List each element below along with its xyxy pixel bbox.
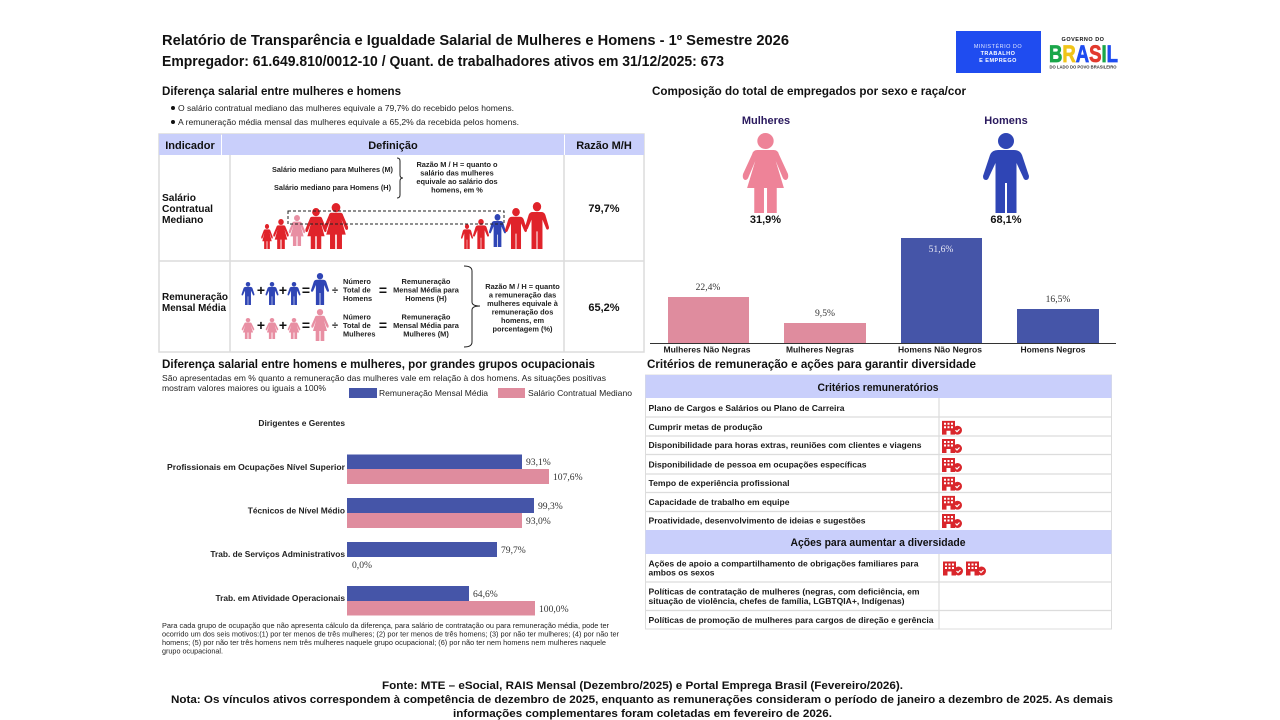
title: Relatório de Transparência e Igualdade Salarial de Mulheres e Homens - 1º Semestre 2026: [162, 33, 789, 49]
row: remuneração mensal média: 65,2%: [588, 302, 620, 314]
formula: homens: +: [279, 282, 287, 298]
group: serviços administrativos: 79,7%: [501, 545, 526, 556]
row: salário contratual mediano: Razão M / H = quanto o: [416, 160, 498, 169]
formula: mulheres: Mensal Média para: [393, 321, 460, 330]
formula: homens: Homens: [343, 294, 372, 303]
row: remuneração mensal média: Remuneração: [162, 292, 228, 303]
group: técnicos: 93,0%: [526, 516, 551, 527]
action rows: Políticas de contratação de mulheres (negras, com deficiência, em: [648, 587, 920, 597]
logo: Ministério do Trabalho e Emprego: TRABALHO: [981, 51, 1016, 57]
icon group: homens: [461, 202, 549, 249]
icon: homens 68,1%: Homens: [984, 115, 1028, 127]
group: atividade operacionais: Trab. em Atividade Operacionais: [215, 593, 345, 603]
heading: critérios: Critérios de remuneração e ações para garantir diversidade: [647, 357, 976, 371]
row: salário contratual mediano: Salário mediano para Mulheres (M): [272, 165, 394, 174]
bar: mulheres não negras: Mulheres Não Negras: [664, 344, 751, 354]
table header: Razão M/H: [576, 140, 632, 152]
criteria rows: Capacidade de trabalho em equipe: [648, 497, 790, 507]
chart description: [162, 373, 606, 393]
group: serviços administrativos: Trab. de Serviços Administrativos: [210, 549, 345, 559]
bullet list: O salário contratual mediano das mulheres equivale a 79,7% do recebido pelos homens.: [178, 103, 514, 113]
row: salário contratual mediano: equivale ao salário dos: [416, 177, 498, 186]
icon group: mulheres: [261, 203, 348, 249]
formula: mulheres: ÷: [332, 320, 338, 332]
bar: homens negros: [1017, 294, 1099, 354]
group: serviços administrativos: [210, 542, 526, 571]
formula: homens: +: [257, 282, 265, 298]
action rows: ambos os sexos: [648, 568, 715, 578]
logo: Ministério do Trabalho e Emprego: E EMPREGO: [979, 58, 1017, 64]
row: remuneração mensal média: [162, 266, 620, 347]
source and note: informações complementares foram coletadas em fevereiro de 2026.: [453, 708, 832, 720]
row: remuneração mensal média: Mensal Média: [162, 303, 226, 314]
footnote: ocorrido um dos seis motivos:(1) por ter menos de três mulheres; (2) por ter menos de três homens; (3) por não ter mulheres; (4) por não ter: [162, 630, 619, 638]
row: salário contratual mediano: salário das mulheres: [420, 168, 494, 178]
heading: diferença salarial: Diferença salarial entre mulheres e homens: [162, 84, 401, 98]
logo: Governo do Brasil: GOVERNO DO: [1062, 37, 1105, 43]
legend: Salário Contratual Mediano: [528, 388, 632, 398]
formula: homens: Número: [343, 277, 371, 286]
chart description: São apresentadas em % quanto a remuneração das mulheres vale em relação à dos homens. As situações positivas: [162, 373, 606, 383]
formula: homens: [242, 273, 460, 305]
formula: mulheres: =: [302, 317, 310, 333]
action rows: situação de violência, chefes de família, LGBTQIA+, Indígenas): [648, 596, 905, 606]
row: salário contratual mediano: Mediano: [162, 215, 203, 226]
formula: homens: Homens (H): [405, 294, 447, 303]
row: salário contratual mediano: Contratual: [162, 204, 213, 215]
bar: mulheres negras: Mulheres Negras: [786, 344, 854, 354]
logo: Governo do Brasil: BRASIL: [1049, 41, 1118, 68]
icon: mulheres 31,9%: [742, 115, 790, 226]
group: serviços administrativos: 0,0%: [352, 560, 372, 571]
footnote: [162, 621, 619, 656]
source and note: [171, 680, 1113, 720]
heading: composição: Composição do total de empregados por sexo e raça/cor: [652, 84, 966, 98]
bar: mulheres negras: 9,5%: [815, 308, 835, 319]
formula: homens: Remuneração: [402, 277, 451, 286]
formula: mulheres: Total de: [343, 321, 371, 330]
heading: grupos ocupacionais: Diferença salarial entre homens e mulheres, por grandes grupos ocupacionais: [162, 357, 595, 371]
formula: mulheres: Mulheres: [343, 330, 375, 338]
icon: mulheres 31,9%: Mulheres: [742, 115, 790, 127]
header: critérios remuneratórios: [646, 375, 1112, 398]
chart description: mostram valores maiores ou iguais a 100%: [162, 383, 326, 393]
source and note: Fonte: MTE – eSocial, RAIS Mensal (Dezembro/2025) e Portal Emprega Brasil (Fevereiro/2026).: [382, 680, 903, 692]
row: remuneração mensal média: porcentagem (%): [493, 324, 553, 334]
bar: mulheres negras: [784, 308, 866, 354]
group: profissionais: 93,1%: [526, 457, 551, 468]
group: profissionais: [167, 454, 583, 484]
icons: two buildings: [943, 562, 986, 576]
bar: homens negros: 16,5%: [1046, 294, 1070, 305]
icon: mulheres 31,9%: 31,9%: [750, 214, 781, 226]
bar chart: grupos ocupacionais: [167, 418, 583, 616]
bar: mulheres não negras: [664, 282, 751, 354]
header: critérios remuneratórios: Critérios remuneratórios: [818, 382, 938, 394]
formula: mulheres: +: [257, 317, 265, 333]
logo: Ministério do Trabalho e Emprego: [956, 31, 1041, 73]
row: salário contratual mediano: [162, 158, 620, 249]
formula: mulheres: [242, 309, 460, 341]
criteria rows: Tempo de experiência profissional: [648, 478, 790, 488]
row: salário contratual mediano: Salário: [162, 193, 196, 204]
criteria table: [646, 375, 1112, 629]
logo: Ministério do Trabalho e Emprego: MINISTÉRIO DO: [974, 43, 1022, 50]
formula: homens: =: [379, 282, 387, 298]
bar: homens negros: Homens Negros: [1020, 344, 1086, 354]
title: [162, 33, 789, 70]
criteria rows: [648, 403, 922, 526]
row: remuneração mensal média: mulheres equivale à: [487, 299, 559, 308]
criteria rows: Disponibilidade de pessoa em ocupações específicas: [648, 460, 867, 470]
formula: mulheres: Número: [343, 312, 371, 322]
bar: mulheres não negras: 22,4%: [696, 282, 720, 293]
group: técnicos: [248, 498, 563, 528]
action rows: Políticas de promoção de mulheres para cargos de direção e gerência: [648, 615, 934, 625]
criteria rows: Plano de Cargos e Salários ou Plano de Carreira: [648, 403, 845, 413]
bar: homens não negros: 51,6%: [929, 244, 953, 255]
footnote: homens; (5) por não ter três homens nem três mulheres naquele grupo ocupacional; (6) por não ter nem homens nem mulheres naquele: [162, 638, 606, 647]
icon: homens 68,1%: [983, 115, 1029, 226]
action rows: Ações de apoio a compartilhamento de obrigações familiares para: [648, 558, 919, 568]
group: atividade operacionais: [215, 586, 569, 616]
criteria rows: Disponibilidade para horas extras, reuniões com clientes e viagens: [648, 440, 922, 450]
formula: homens: =: [302, 282, 310, 298]
source and note: Nota: Os vínculos ativos correspondem à competência de dezembro de 2025, enquanto as remunerações consideram o período de janeiro a dezembro de 2025. As demais: [171, 694, 1113, 706]
bar chart: sexo e raça/cor: [650, 238, 1116, 354]
header: ações: [646, 530, 1112, 554]
formula: mulheres: Mulheres (M): [403, 330, 449, 338]
indicator table: [159, 134, 644, 352]
row: salário contratual mediano: homens, em %: [431, 186, 483, 194]
group: dirigentes e gerentes: Dirigentes e Gerentes: [258, 418, 345, 428]
formula: homens: Total de: [343, 286, 371, 294]
formula: mulheres: =: [379, 317, 387, 333]
row: salário contratual mediano: 79,7%: [588, 203, 620, 215]
bar: homens não negros: [898, 238, 982, 354]
row: remuneração mensal média: homens, em: [501, 316, 544, 325]
legend: [349, 388, 632, 398]
criteria rows: Proatividade, desenvolvimento de ideias e sugestões: [648, 516, 866, 526]
formula: mulheres: +: [279, 317, 287, 333]
criteria rows: Cumprir metas de produção: [648, 422, 762, 432]
footnote: grupo ocupacional.: [162, 646, 223, 656]
action rows: [648, 558, 934, 625]
table header: Definição: [368, 140, 418, 152]
icons: building with check: [942, 421, 962, 528]
group: técnicos: 99,3%: [538, 501, 563, 512]
header: ações: Ações para aumentar a diversidade: [790, 537, 966, 549]
formula: homens: Mensal Média para: [393, 286, 460, 294]
row: remuneração mensal média: a remuneração das: [489, 290, 556, 300]
bullet list: [171, 103, 519, 127]
bar: homens não negros: Homens Não Negros: [898, 344, 982, 354]
legend: Remuneração Mensal Média: [379, 388, 488, 398]
row: salário contratual mediano: Salário mediano para Homens (H): [274, 183, 392, 192]
logo: Governo do Brasil: DO LADO DO POVO BRASILEIRO: [1049, 64, 1117, 70]
bullet list: A remuneração média mensal das mulheres equivale a 65,2% da recebida pelos homens.: [178, 117, 519, 127]
group: técnicos: Técnicos de Nível Médio: [248, 506, 345, 516]
group: profissionais: Profissionais em Ocupações Nível Superior: [167, 462, 346, 472]
formula: mulheres: Remuneração: [402, 312, 451, 322]
group: profissionais: 107,6%: [553, 472, 583, 483]
title: Empregador: 61.649.810/0012-10 / Quant. de trabalhadores ativos em 31/12/2025: 673: [162, 54, 724, 70]
row: remuneração mensal média: remuneração dos: [492, 308, 553, 316]
formula: homens: ÷: [332, 285, 338, 297]
group: atividade operacionais: 64,6%: [473, 589, 498, 600]
table header: Indicador: [165, 140, 215, 152]
footnote: Para cada grupo de ocupação que não apresenta cálculo da diferença, para salário de contratação ou para remuneração média, pode ter: [162, 621, 609, 630]
table header: [159, 134, 644, 155]
icon: homens 68,1%: 68,1%: [990, 214, 1022, 226]
group: atividade operacionais: 100,0%: [539, 604, 569, 615]
row: remuneração mensal média: Razão M / H = quanto: [485, 282, 560, 291]
